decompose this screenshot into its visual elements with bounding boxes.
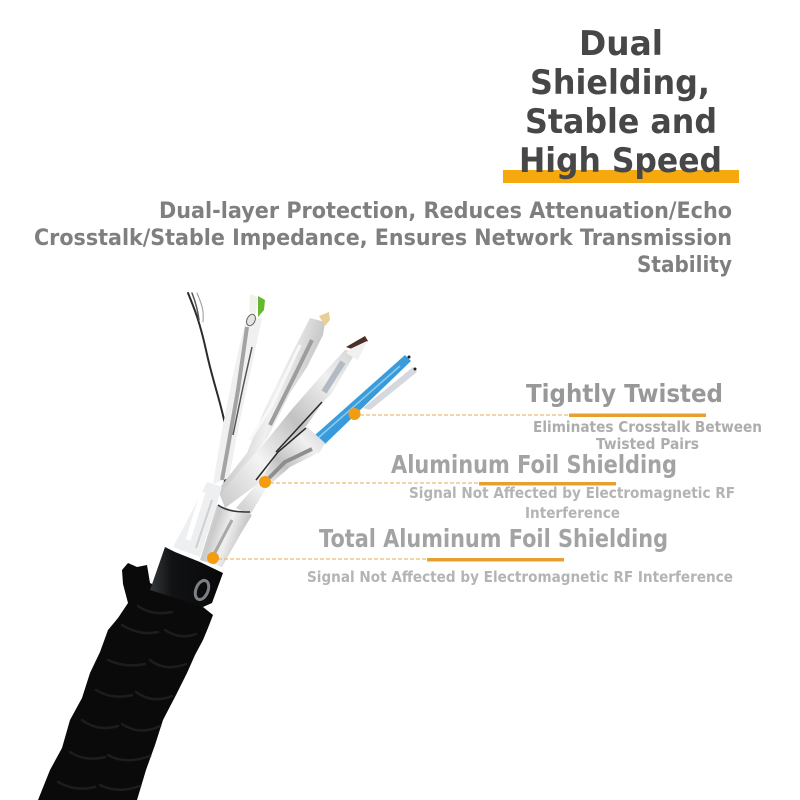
blue pair foil xyxy=(236,427,325,515)
title xyxy=(503,24,739,183)
subtitle text block: Dual-layer Protection, Reduces Attenuation/Echo xyxy=(159,199,732,224)
callout: tightly twisted: Tightly Twisted xyxy=(526,379,723,408)
title: High Speed xyxy=(519,141,722,181)
callout: total aluminum foil shielding xyxy=(207,524,733,586)
callout: tightly twisted: Twisted Pairs xyxy=(596,435,699,453)
subtitle text block: Crosstalk/Stable Impedance, Ensures Network Transmission xyxy=(34,226,732,251)
subtitle text block xyxy=(34,199,732,278)
drain wire xyxy=(188,293,228,485)
title: Dual xyxy=(579,24,663,64)
callout: aluminum foil shielding: Signal Not Affected by Electromagnetic RF xyxy=(409,484,735,502)
callout: tightly twisted: Eliminates Crosstalk Between xyxy=(533,418,762,436)
black cable jacket xyxy=(150,547,223,607)
brown pair with foil xyxy=(220,336,368,508)
beige pair with foil xyxy=(218,312,330,500)
callout: aluminum foil shielding xyxy=(259,450,735,522)
callout: aluminum foil shielding: Aluminum Foil Shielding xyxy=(391,450,677,479)
cable illustration xyxy=(38,293,417,800)
callout: total aluminum foil shielding: Total Aluminum Foil Shielding xyxy=(319,524,668,553)
callout: tightly twisted xyxy=(348,379,762,453)
subtitle text block: Stability xyxy=(637,253,732,278)
title: Stable and xyxy=(525,102,717,142)
callout: total aluminum foil shielding: Signal Not Affected by Electromagnetic RF Interference xyxy=(307,568,733,586)
callout: aluminum foil shielding: Interference xyxy=(525,504,620,522)
braided black sleeve xyxy=(38,563,213,800)
outer foil shield, wrapped ends xyxy=(173,482,252,567)
green pair with foil xyxy=(213,294,265,484)
title: Shielding, xyxy=(530,63,710,103)
blue twisted pair xyxy=(315,355,417,444)
title highlight bar xyxy=(503,170,739,183)
